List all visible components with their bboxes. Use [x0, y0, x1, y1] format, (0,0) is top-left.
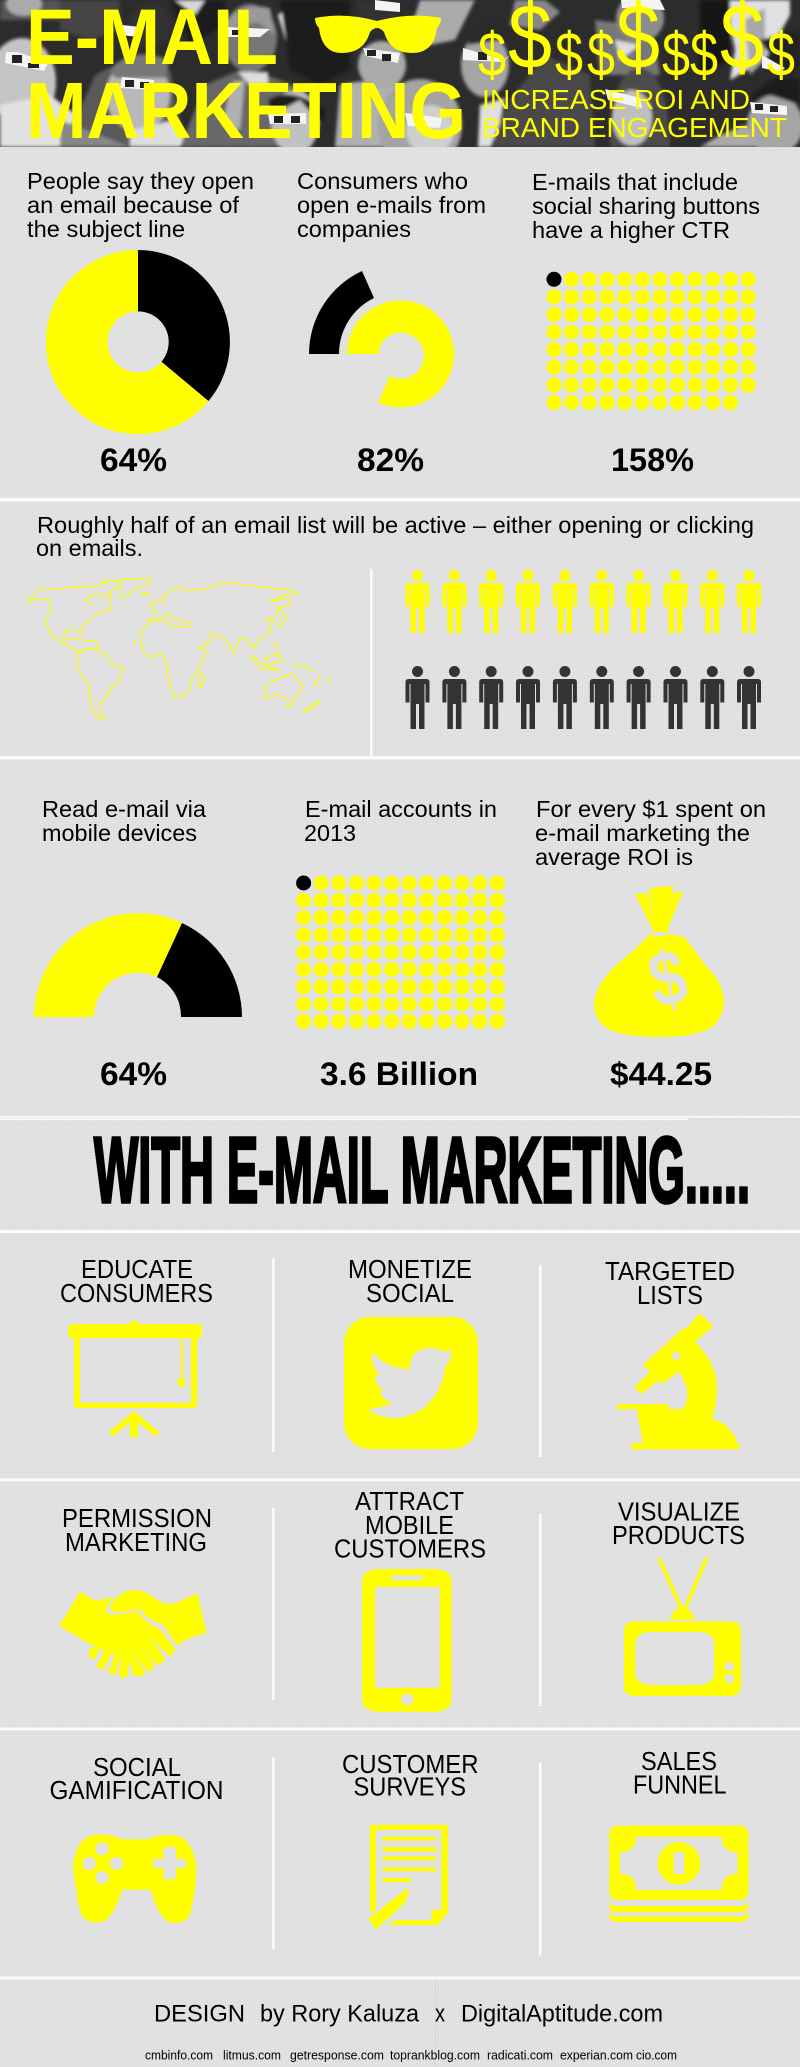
icon: projector screen	[68, 1321, 202, 1437]
icon: sunglasses	[315, 16, 441, 53]
label: PRODUCTS	[612, 1522, 745, 1550]
text: accounts: E-mail accounts in	[305, 796, 497, 822]
value 82%: 82%	[357, 442, 424, 478]
text: mobile: Read e-mail via	[42, 796, 207, 822]
icon: handshake	[59, 1590, 207, 1678]
subtitle: INCREASE ROI AND	[482, 84, 750, 115]
panel: active email list	[27, 512, 761, 729]
panel: social gamification	[50, 1754, 224, 1923]
text: subject line: the subject line	[27, 216, 185, 242]
icon: money bag	[594, 886, 724, 1037]
label: FUNNEL	[633, 1772, 726, 1800]
label	[60, 1256, 213, 1308]
text: social sharing: E-mails that include	[532, 169, 738, 195]
label	[342, 1751, 478, 1802]
text: social sharing	[532, 169, 760, 243]
label	[50, 1754, 224, 1805]
label	[633, 1748, 726, 1800]
value 64%: 64%	[100, 1056, 167, 1092]
label	[348, 1256, 472, 1308]
text: ROI	[535, 796, 766, 870]
text: social sharing: have a higher CTR	[532, 217, 730, 243]
footer: sources: getresponse.com	[290, 2048, 384, 2062]
title: E-MAIL MARKETING: MARKETING	[26, 66, 466, 155]
dollar signs row	[478, 0, 795, 90]
panel: sales funnel	[609, 1748, 748, 1922]
text: accounts: 2013	[304, 820, 356, 846]
label: VISUALIZE	[618, 1499, 740, 1527]
header photo: audience in 3D glasses	[0, 0, 800, 147]
subtitle: BRAND ENGAGEMENT	[482, 112, 787, 143]
world map	[27, 578, 331, 718]
value 3.6 Billion: 3.6 Billion	[320, 1056, 478, 1092]
title: E-MAIL MARKETING	[26, 0, 466, 155]
header banner	[0, 0, 800, 147]
text: ROI: e-mail marketing the	[535, 820, 750, 846]
dollar signs row: $	[587, 21, 615, 90]
label: LISTS	[637, 1282, 703, 1310]
value 64%: 64%	[100, 442, 167, 478]
text: ROI: For every $1 spent on	[536, 796, 766, 822]
label: CONSUMERS	[60, 1280, 213, 1308]
text: consumers: Consumers who	[297, 168, 468, 194]
icon: money bag: $	[641, 931, 694, 1025]
label: SALES	[641, 1748, 717, 1776]
label	[612, 1499, 745, 1550]
dot grid chart	[546, 272, 748, 402]
label: PERMISSION	[62, 1505, 212, 1533]
panel: accounts stat	[296, 796, 498, 1092]
footer: design credit: by Rory Kaluza	[260, 2000, 420, 2027]
footer: design credit: x	[435, 2000, 445, 2027]
panel: targeted lists	[605, 1258, 739, 1449]
people pictogram: dark row	[406, 666, 761, 729]
donut chart 64%	[46, 250, 230, 434]
label: SOCIAL	[93, 1754, 181, 1782]
text: active list: on emails.	[36, 535, 143, 561]
subtitle	[482, 84, 787, 143]
label: GAMIFICATION	[50, 1777, 224, 1805]
value 158%: 158%	[611, 442, 694, 478]
label: EDUCATE	[81, 1256, 193, 1284]
panel: ROI stat	[535, 796, 766, 1092]
footer: sources: cmbinfo.com	[145, 2048, 213, 2062]
panel: educate consumers	[60, 1256, 213, 1437]
label	[334, 1488, 486, 1564]
dollar signs row: $	[662, 21, 690, 90]
label: TARGETED	[605, 1258, 735, 1286]
dollar signs row: $	[478, 21, 506, 90]
people pictogram: yellow row	[406, 570, 761, 633]
footer: design credit	[154, 2000, 663, 2027]
footer: sources: experian.com	[560, 2048, 633, 2062]
panel: mobile reading stat	[34, 796, 242, 1092]
dollar signs row: $	[555, 21, 583, 90]
text: consumers: companies	[297, 216, 411, 242]
label: ATTRACT	[355, 1488, 464, 1516]
label	[62, 1505, 212, 1557]
text: consumers	[297, 168, 486, 242]
text: mobile: mobile devices	[42, 820, 197, 846]
footer: sources: cio.com	[636, 2048, 677, 2062]
footer: sources: litmus.com	[223, 2048, 281, 2062]
icon: television	[624, 1558, 741, 1696]
icon: microscope	[617, 1313, 739, 1449]
footer: design credit: DESIGN	[154, 2000, 245, 2027]
gauge chart 64%	[34, 913, 242, 1017]
panel: attract mobile customers	[334, 1488, 486, 1712]
panel: subject line stat	[27, 168, 254, 478]
panel: consumers stat	[297, 168, 486, 478]
text: active list: Roughly half of an email list will be active – either opening or clicking	[37, 512, 754, 538]
text: consumers: open e-mails from	[297, 192, 486, 218]
value $44.25: $44.25	[610, 1056, 712, 1092]
footer: design credit: DigitalAptitude.com	[461, 2000, 663, 2027]
panel: monetize social	[344, 1256, 478, 1449]
label: SURVEYS	[354, 1774, 466, 1802]
panel: visualize products	[612, 1499, 745, 1696]
label: CUSTOMER	[342, 1751, 478, 1779]
label: MOBILE	[365, 1512, 454, 1540]
text: social sharing: social sharing buttons	[532, 193, 760, 219]
text: subject line: People say they open	[27, 168, 254, 194]
icon: survey document	[368, 1825, 448, 1930]
label: MARKETING	[65, 1529, 207, 1557]
icon: smartphone	[362, 1569, 452, 1712]
label: MONETIZE	[348, 1256, 472, 1284]
footer: sources: radicati.com	[487, 2048, 553, 2062]
dot grid chart	[296, 876, 498, 1021]
text: subject line	[27, 168, 254, 242]
icon: stack of money	[609, 1826, 748, 1922]
text: ROI: average ROI is	[535, 844, 693, 870]
footer: sources	[145, 2048, 677, 2062]
text: accounts	[304, 796, 497, 846]
panel: permission marketing	[59, 1505, 212, 1678]
label: CUSTOMERS	[334, 1536, 486, 1564]
icon: twitter	[344, 1317, 478, 1449]
icon: game controller	[73, 1835, 196, 1923]
text: mobile	[42, 796, 207, 846]
text: subject line: an email because of	[27, 192, 239, 218]
radial chart 82%	[309, 271, 454, 407]
dollar signs row: $	[690, 21, 718, 90]
text: active list	[36, 512, 754, 561]
panel: customer surveys	[342, 1751, 478, 1930]
label	[605, 1258, 735, 1310]
footer: sources: toprankblog.com	[390, 2048, 480, 2062]
label: SOCIAL	[366, 1280, 454, 1308]
panel: social sharing stat	[532, 169, 760, 478]
